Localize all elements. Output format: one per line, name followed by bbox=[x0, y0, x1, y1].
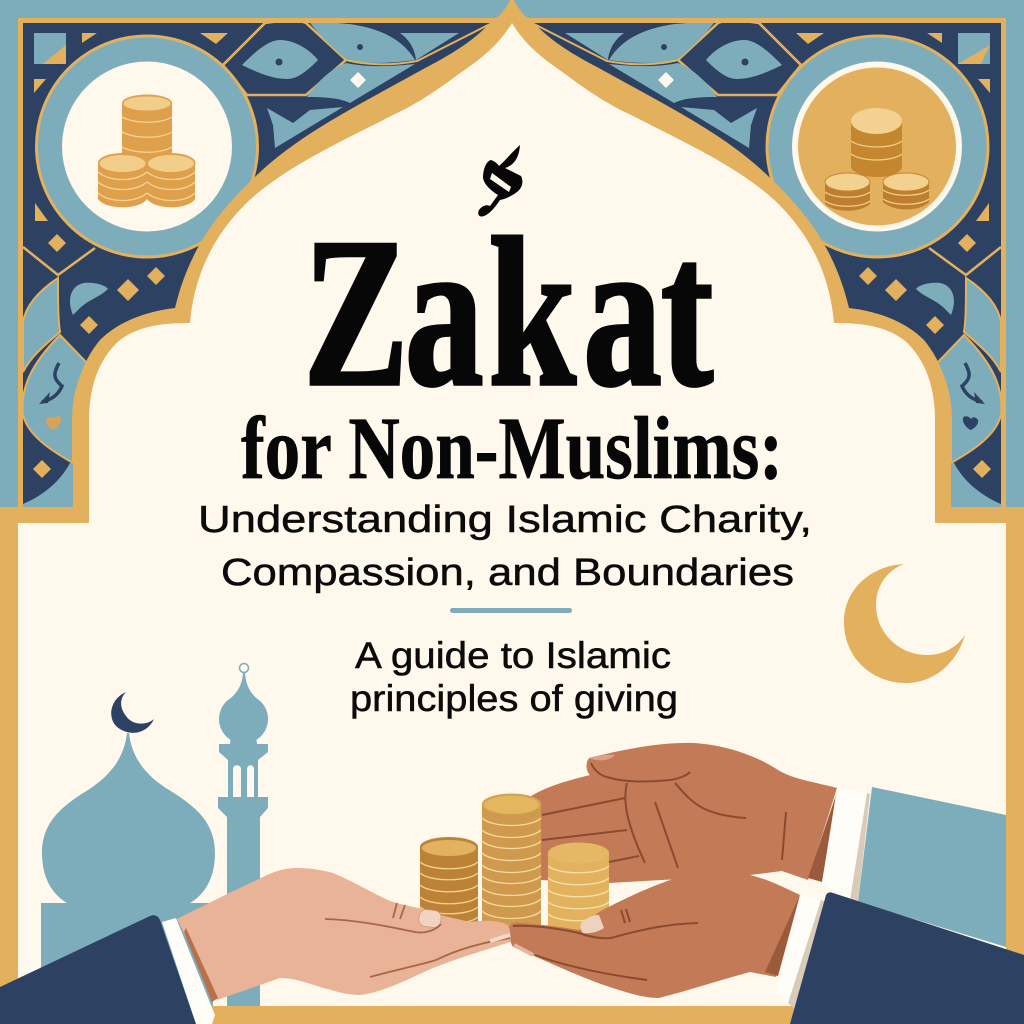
icon: crescent moon bbox=[844, 564, 965, 683]
left navy sleeve and cuff bbox=[0, 915, 215, 1024]
panel: ornamental frame bbox=[20, 20, 1004, 510]
text: tagline line one: A guide to Islamic bbox=[355, 635, 671, 676]
lower brown hand bbox=[509, 872, 800, 998]
right teal sleeve and cuffs bbox=[776, 787, 1024, 1024]
icon: coin medallion left bbox=[35, 34, 259, 258]
title: Zakat: Zakat bbox=[303, 194, 713, 431]
coin stack: short dark bbox=[420, 837, 478, 930]
upper brown hand bbox=[531, 743, 837, 883]
subtitle: for Non-Muslims: for Non-Muslims: bbox=[241, 400, 783, 498]
coin stack: tall bbox=[482, 794, 541, 935]
mosque crescent bbox=[111, 692, 154, 733]
left spandrel ornament bbox=[22, 21, 492, 507]
left light hand bbox=[177, 868, 511, 1002]
icon: mosque silhouette bbox=[41, 664, 268, 1006]
text: tagline line two: principles of giving bbox=[350, 678, 678, 719]
right spandrel ornament bbox=[532, 21, 1002, 507]
text: subtitle line two: Compassion, and Boundaries bbox=[221, 552, 794, 594]
icon: calligraphic ornament bbox=[478, 145, 522, 217]
coin stack: light bbox=[548, 842, 609, 940]
mosque dome bbox=[41, 733, 215, 1006]
minaret bbox=[218, 664, 268, 1006]
text: subtitle line one: Understanding Islamic Charity, bbox=[198, 499, 812, 541]
divider rule bbox=[450, 608, 572, 613]
icon: coin medallion right bbox=[766, 34, 990, 258]
